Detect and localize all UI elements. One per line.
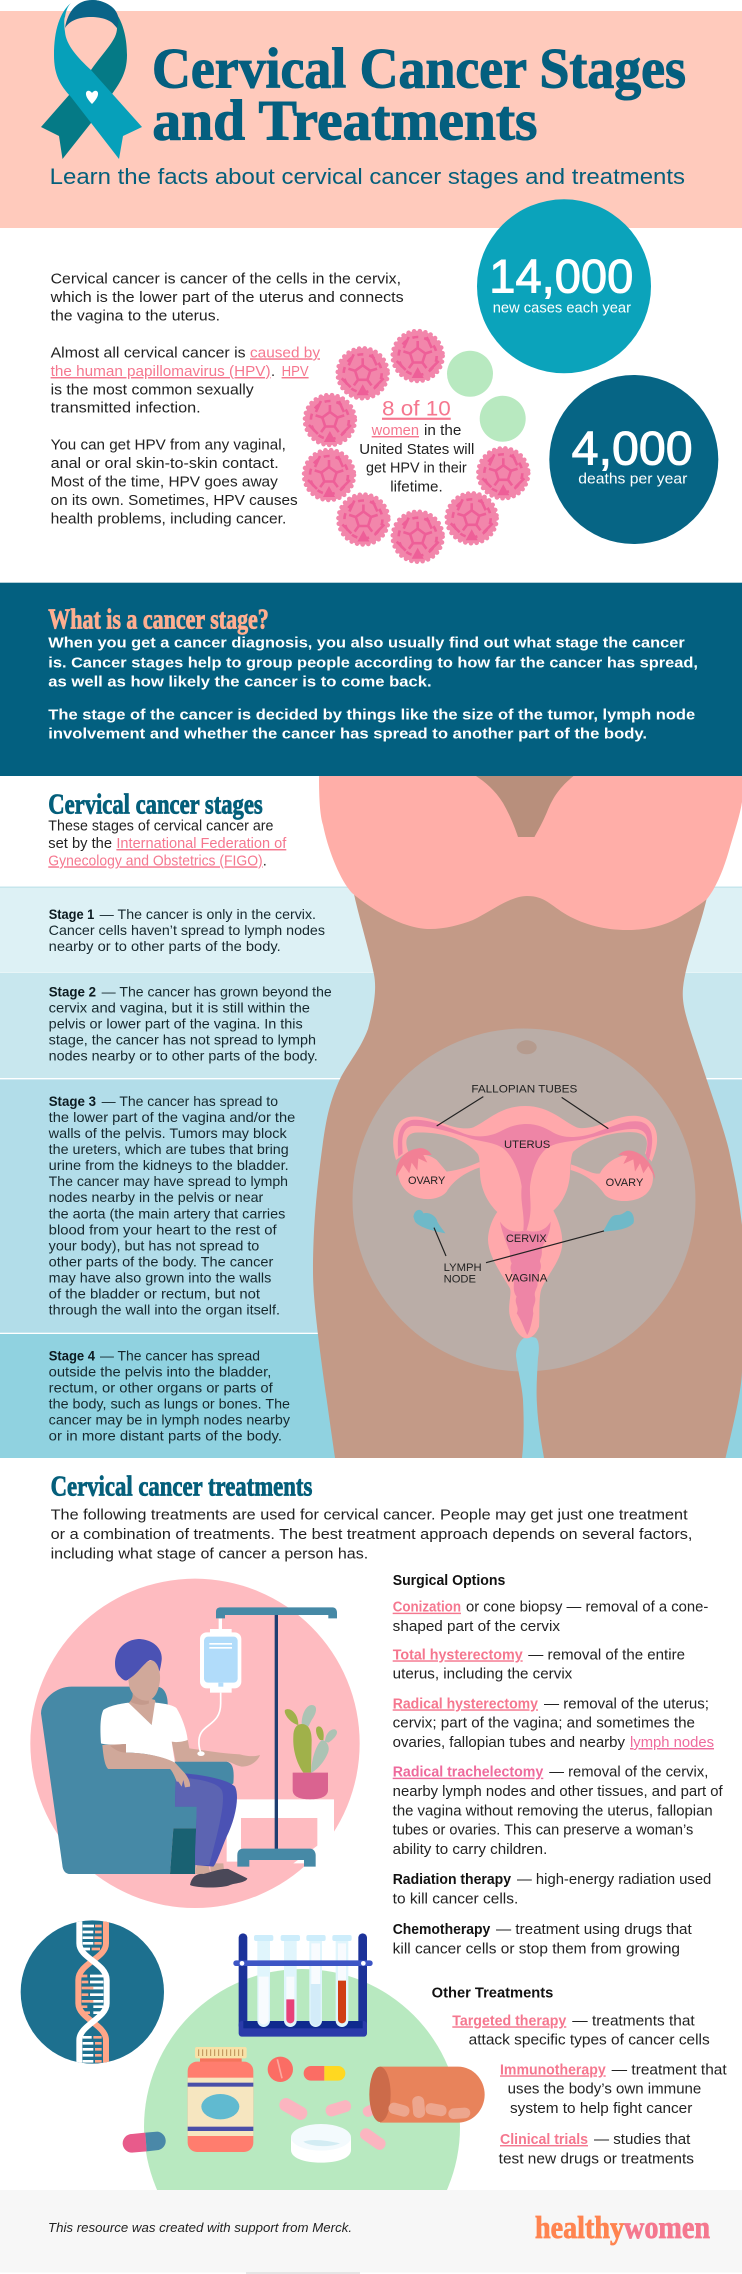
chart: 8 of 10 ring of virus icons: United States will xyxy=(359,442,474,458)
stage 4 text xyxy=(49,1348,290,1444)
spilled orange bottle xyxy=(369,2067,485,2123)
stat: 14,000 new cases: 14,000 xyxy=(489,250,633,303)
intro text block: transmitted infection. xyxy=(51,401,201,417)
stage 3 text: through the wall into the organ itself. xyxy=(49,1303,280,1318)
intro text block: HPV xyxy=(282,364,309,380)
intro text block: Cervical cancer is cancer of the cells in the cervix, xyxy=(51,271,401,287)
stat: 14,000 new cases xyxy=(477,199,651,373)
surgical options text: Surgical Options xyxy=(393,1573,505,1589)
heading: cervical cancer treatments: or a combination of treatments. The best treatment approach depends on several factors, xyxy=(51,1527,692,1543)
intro text block: Most of the time, HPV goes away xyxy=(51,474,279,490)
surgical options text: Radical hysterectomy xyxy=(393,1696,538,1712)
intro text block: caused by xyxy=(250,345,321,361)
stage 3 text: your body), but has not spread to xyxy=(49,1238,259,1253)
stat: 4,000 deaths xyxy=(549,375,718,544)
intro text block: the human papillomavirus (HPV) xyxy=(51,364,271,380)
stage 3 text: — The cancer has spread to xyxy=(102,1094,278,1109)
pill bottle xyxy=(188,2047,253,2152)
stage 2 text: Stage 2 xyxy=(49,984,96,999)
surgical options text: — treatment using drugs that xyxy=(496,1922,692,1938)
stage 2 text: stage, the cancer has not spread to lymph xyxy=(49,1033,316,1048)
other treatments text: test new drugs or treatments xyxy=(499,2151,694,2167)
stage 3 text: urine from the kidneys to the bladder. xyxy=(49,1158,289,1173)
panel: what is a cancer stage: involvement and whether the cancer has spread to another part of the body. xyxy=(48,726,647,743)
stage 4 text: the body, such as lungs or bones. The xyxy=(49,1396,290,1412)
surgical options text: Conization xyxy=(393,1600,461,1616)
panel: stage bands background xyxy=(0,886,742,1458)
stage 4 text: cancer may be in lymph nodes nearby xyxy=(49,1413,290,1428)
stage 1 text: Cancer cells haven’t spread to lymph nodes xyxy=(49,923,325,938)
stage 1 text xyxy=(49,907,325,954)
other treatments text xyxy=(432,1986,727,2167)
loose pills xyxy=(123,2057,388,2163)
test tube rack xyxy=(233,1933,373,2037)
stage 2 text: — The cancer has grown beyond the xyxy=(102,984,332,999)
intro text block: You can get HPV from any vaginal, xyxy=(51,438,286,454)
chart: 8 of 10 ring of virus icons: 8 of 10 xyxy=(382,397,451,421)
title: Cervical Cancer Stages xyxy=(152,37,686,100)
heading: cervical cancer stages: set by the xyxy=(48,836,112,852)
surgical options text: Radiation therapy xyxy=(393,1872,511,1888)
surgical options text: shaped part of the cervix xyxy=(393,1619,561,1635)
surgical options text: ability to carry children. xyxy=(393,1842,547,1858)
stage 4 text: rectum, or other organs or parts of xyxy=(49,1380,273,1395)
panel: what is a cancer stage xyxy=(0,583,742,776)
heading: cervical cancer treatments: including what stage of cancer a person has. xyxy=(51,1547,368,1563)
stage 2 text xyxy=(49,984,332,1064)
illustration: green circle with medication xyxy=(122,1933,485,2190)
heading: cervical cancer stages: These stages of cervical cancer are xyxy=(48,819,273,835)
stat: 4,000 deaths: deaths per year xyxy=(578,470,687,487)
other treatments text: — treatment that xyxy=(612,2062,727,2078)
stage 2 text: cervix and vagina, but it is still within the xyxy=(49,1000,310,1015)
intro text block: on its own. Sometimes, HPV causes xyxy=(51,493,298,509)
title: and Treatments xyxy=(152,89,537,152)
diagram: female reproductive system: LYMPH xyxy=(444,1262,482,1274)
illustration: patient receiving IV infusion xyxy=(30,1579,360,1908)
stage 1 text: — The cancer is only in the cervix. xyxy=(100,907,316,922)
stage 4 text: Stage 4 xyxy=(49,1348,95,1363)
heading: cervical cancer treatments: The following treatments are used for cervical cancer. People may get just one treatment xyxy=(51,1507,688,1523)
diagram: female reproductive system: OVARY xyxy=(606,1177,643,1189)
stage 3 text: may have also grown into the walls xyxy=(49,1271,272,1286)
stage 3 text: of the bladder or rectum, but not xyxy=(49,1287,260,1302)
chart: 8 of 10 ring of virus icons: women xyxy=(371,423,419,439)
surgical options text: cervix; part of the vagina; and sometimes the xyxy=(393,1716,695,1732)
surgical options text: the vagina without removing the uterus, fallopian xyxy=(393,1803,713,1819)
other treatments text: — treatments that xyxy=(572,2013,695,2029)
diagram: female reproductive system: NODE xyxy=(444,1273,476,1285)
intro text block: Almost all cervical cancer is xyxy=(51,345,246,361)
surgical options text: tubes or ovaries. This can preserve a woman’s xyxy=(393,1823,693,1839)
stage 1 text: Stage 1 xyxy=(49,907,95,922)
stage 3 text: the lower part of the vagina and/or the xyxy=(49,1110,295,1125)
illustration: torso xyxy=(313,776,742,1458)
surgical options text: — removal of the cervix, xyxy=(549,1765,708,1781)
icon: awareness ribbon xyxy=(41,0,142,159)
other treatments text: — studies that xyxy=(594,2132,690,2148)
other treatments text: Other Treatments xyxy=(432,1986,553,2002)
heading: cervical cancer treatments: Cervical cancer treatments xyxy=(51,1472,312,1503)
surgical options text: — removal of the uterus; xyxy=(544,1696,709,1712)
stage 4 text: outside the pelvis into the bladder, xyxy=(49,1364,271,1379)
heading: cervical cancer stages xyxy=(48,789,287,869)
panel: what is a cancer stage: is. Cancer stages help to group people according to how far the cancer has spread, xyxy=(48,654,698,671)
stage 3 text: The cancer may have spread to lymph xyxy=(49,1174,288,1189)
diagram: female reproductive system: UTERUS xyxy=(504,1139,550,1151)
surgical options text: Radical trachelectomy xyxy=(393,1765,543,1781)
stage 3 text: Stage 3 xyxy=(49,1094,96,1109)
title xyxy=(152,37,686,152)
surgical options text: to kill cancer cells. xyxy=(393,1891,518,1907)
stage 2 text: nodes nearby or to other parts of the body. xyxy=(49,1049,318,1064)
intro text block: anal or oral skin-to-skin contact. xyxy=(51,456,279,472)
stage 3 text: the aorta (the main artery that carries xyxy=(49,1206,286,1221)
other treatments text: Immunotherapy xyxy=(500,2062,606,2078)
other treatments text: system to help fight cancer xyxy=(510,2101,693,2117)
panel: what is a cancer stage: The stage of the cancer is decided by things like the size of the tumor, lymph node xyxy=(48,706,695,723)
other treatments text: uses the body’s own immune xyxy=(508,2082,701,2098)
heading: cervical cancer stages: International Federation of xyxy=(116,836,287,852)
footer xyxy=(0,2190,742,2274)
stat: 4,000 deaths: 4,000 xyxy=(572,421,693,474)
stage 3 text: walls of the pelvis. Tumors may block xyxy=(48,1126,287,1141)
chart: 8 of 10 ring of virus icons: in the xyxy=(424,423,461,439)
other treatments text: Targeted therapy xyxy=(452,2013,566,2029)
intro text block: the vagina to the uterus. xyxy=(51,308,220,324)
stage 3 text: other parts of the body. The cancer xyxy=(49,1254,274,1270)
heading: cervical cancer stages: . xyxy=(263,853,267,869)
heading: cervical cancer treatments xyxy=(51,1472,692,1563)
surgical options text xyxy=(393,1573,724,1957)
intro text block: is the most common sexually xyxy=(51,382,254,398)
surgical options text: — removal of the entire xyxy=(528,1647,685,1663)
stat: 14,000 new cases: new cases each year xyxy=(493,299,631,316)
header band xyxy=(0,11,742,228)
surgical options text: Chemotherapy xyxy=(393,1922,490,1938)
footer: This resource was created with support from Merck. xyxy=(48,2221,352,2235)
surgical options text: nearby lymph nodes and other tissues, and part of xyxy=(393,1784,724,1800)
stage 3 text: nodes nearby in the pelvis or near xyxy=(49,1190,264,1205)
panel: what is a cancer stage: When you get a cancer diagnosis, you also usually find out what stage the cancer xyxy=(48,635,685,652)
icon: DNA helix xyxy=(21,1917,164,2067)
diagram: female reproductive system: CERVIX xyxy=(506,1233,547,1245)
heading: cervical cancer stages: Cervical cancer stages xyxy=(48,789,263,820)
stage 3 text: blood from your heart to the rest of xyxy=(49,1222,277,1237)
heading: cervical cancer stages: Gynecology and Obstetrics (FIGO) xyxy=(48,853,263,869)
panel: what is a cancer stage: What is a cancer stage? xyxy=(48,604,269,635)
diagram: female reproductive system: VAGINA xyxy=(505,1272,548,1284)
surgical options text: kill cancer cells or stop them from growing xyxy=(393,1941,680,1957)
chart: 8 of 10 ring of virus icons: lifetime. xyxy=(390,480,443,496)
diagram: female reproductive system xyxy=(393,1084,657,1338)
surgical options text: uterus, including the cervix xyxy=(393,1667,573,1683)
chart: 8 of 10 ring of virus icons: get HPV in their xyxy=(366,461,467,477)
diagram: female reproductive system: OVARY xyxy=(408,1175,445,1187)
surgical options text: or cone biopsy — removal of a cone- xyxy=(466,1600,709,1616)
diagram: female reproductive system: FALLOPIAN TUBES xyxy=(471,1084,577,1096)
stage 3 text: the ureters, which are tubes that bring xyxy=(49,1142,289,1157)
stage 1 text: nearby or to other parts of the body. xyxy=(49,939,281,954)
surgical options text: ovaries, fallopian tubes and nearby xyxy=(393,1735,626,1751)
surgical options text: Total hysterectomy xyxy=(393,1647,523,1663)
surgical options text: — high-energy radiation used xyxy=(517,1872,711,1888)
other treatments text: Clinical trials xyxy=(500,2132,588,2148)
panel: what is a cancer stage: as well as how likely the cancer is to come back. xyxy=(48,674,432,691)
chart: 8 of 10 ring of virus icons xyxy=(304,331,528,562)
intro text block: . xyxy=(271,364,275,380)
stage 4 text: or in more distant parts of the body. xyxy=(49,1429,282,1444)
surgical options text: lymph nodes xyxy=(630,1735,714,1751)
stage 2 text: pelvis or lower part of the vagina. In this xyxy=(49,1016,303,1032)
stage 4 text: — The cancer has spread xyxy=(100,1348,260,1363)
subtitle: Learn the facts about cervical cancer stages and treatments xyxy=(50,164,685,189)
footer: healthy xyxy=(535,2209,624,2245)
other treatments text: attack specific types of cancer cells xyxy=(469,2033,710,2049)
footer: women xyxy=(624,2209,710,2245)
stage 3 text xyxy=(48,1094,295,1318)
intro text block: which is the lower part of the uterus and connects xyxy=(49,290,404,306)
intro text block: health problems, including cancer. xyxy=(51,511,286,527)
intro text block xyxy=(49,271,404,527)
